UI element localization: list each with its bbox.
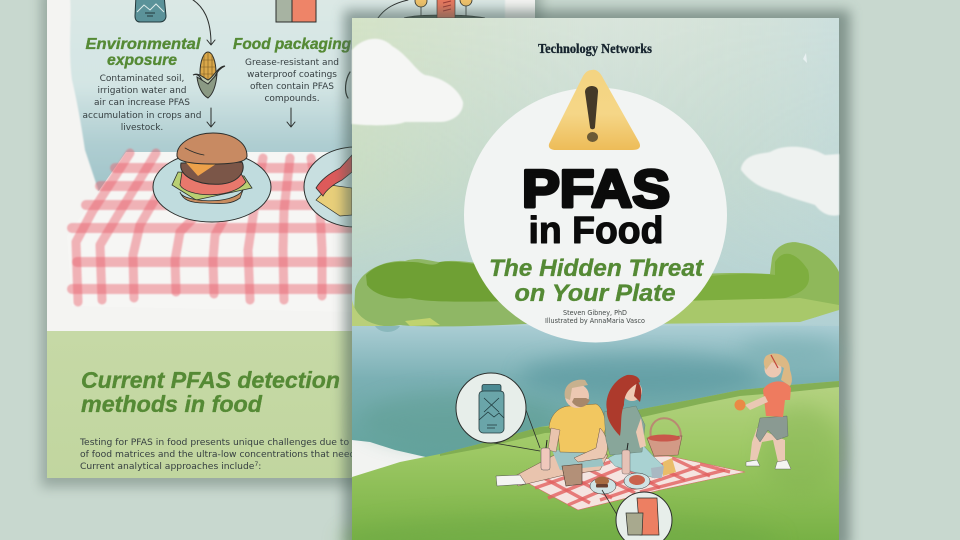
icon: paper bag (637, 498, 659, 535)
front cover water (352, 326, 839, 458)
main title: PFAS (522, 160, 670, 219)
text: food packaging: often contain PFAS (250, 82, 334, 92)
icon: packaging top (276, 0, 316, 22)
text: environmental exposure: air can increase PFAS (94, 98, 190, 108)
text: environmental exposure: Contaminated soil, (100, 74, 184, 84)
authors: Illustrated by AnnaMaria Vasco (545, 317, 645, 325)
icon: water jar (479, 384, 504, 433)
left cloud (352, 39, 463, 125)
text: food packaging: compounds. (264, 94, 320, 104)
text: environmental exposure: irrigation water and (97, 86, 187, 96)
heading: current PFAS detection methods: Current PFAS detection (81, 367, 340, 393)
authors (545, 309, 645, 325)
food box (562, 464, 582, 486)
white gap above the hill (352, 430, 430, 482)
callout line: jar (494, 410, 540, 451)
exclamation mark (585, 86, 598, 129)
text: detection intro: Current analytical approaches include (80, 461, 254, 472)
icon: clipped figure at page edge (346, 72, 350, 98)
arrow: jar to corn (190, 0, 215, 45)
cup (541, 448, 550, 470)
small sky fleck (803, 53, 807, 63)
watercolour sky on back page (70, 0, 505, 195)
logo: Technology Networks (538, 41, 652, 56)
text: food packaging: waterproof coatings (247, 70, 337, 80)
icon: plate of fries (304, 147, 406, 227)
text: environmental exposure: accumulation in crops and (83, 111, 201, 121)
icon: corn (193, 52, 225, 98)
callout: jar icon (456, 373, 526, 443)
heading: food packaging: Food packaging (233, 36, 351, 53)
panel: front cover (340, 10, 850, 540)
icon: burger on plate (153, 133, 271, 222)
cup (622, 450, 630, 474)
text: detection intro: : (258, 461, 261, 472)
panel: back page (41, 0, 541, 487)
text: detection intro: 7 (254, 461, 258, 468)
text: detection intro (79, 437, 429, 472)
text: environmental exposure: livestock. (121, 123, 163, 133)
right cloud (741, 147, 839, 216)
heading: current PFAS detection methods (81, 367, 340, 417)
heading: environmental exposure: Environmental (86, 36, 201, 53)
heading: environmental exposure: exposure (107, 52, 177, 69)
text: environmental exposure (83, 74, 201, 133)
text: detection intro: Testing for PFAS in food presents unique challenges due to the complexity (79, 437, 421, 448)
right tree line (640, 242, 839, 324)
text: detection intro: of food matrices and the ultra-low concentrations that need to be detected. (80, 449, 429, 460)
callout: packaging icon (616, 492, 672, 540)
main title: in Food (528, 210, 664, 252)
callout line: packaging (602, 490, 625, 528)
illustration: top of back page (378, 0, 485, 18)
grass hill (340, 381, 840, 540)
heading: current PFAS detection methods: methods in food (81, 391, 263, 417)
woman (604, 375, 676, 478)
left tree line (352, 259, 560, 332)
text: food packaging (245, 58, 339, 104)
heading: environmental exposure (86, 36, 201, 69)
back page green footer (47, 331, 535, 478)
subtitle: The Hidden Threat (489, 255, 704, 282)
title circle (464, 88, 727, 342)
small plate on blanket (624, 473, 650, 489)
small burger on blanket (590, 476, 616, 494)
child (734, 354, 792, 469)
white tablecloth (67, 152, 352, 312)
text: food packaging: Grease-resistant and (245, 58, 339, 68)
main title (522, 160, 670, 252)
icon: jar top (135, 0, 166, 22)
arrow: packaging to plate (287, 108, 295, 127)
icon: coffee cup (626, 513, 643, 535)
subtitle: on Your Plate (514, 280, 676, 307)
picnic basket (647, 418, 682, 456)
authors: Steven Gibney, PhD (563, 309, 627, 317)
warning triangle (549, 70, 640, 150)
subtitle (489, 255, 704, 307)
man (496, 380, 608, 486)
arrow: corn to burger (207, 108, 215, 127)
checked tablecloth (72, 153, 352, 302)
picnic blanket (526, 456, 745, 510)
